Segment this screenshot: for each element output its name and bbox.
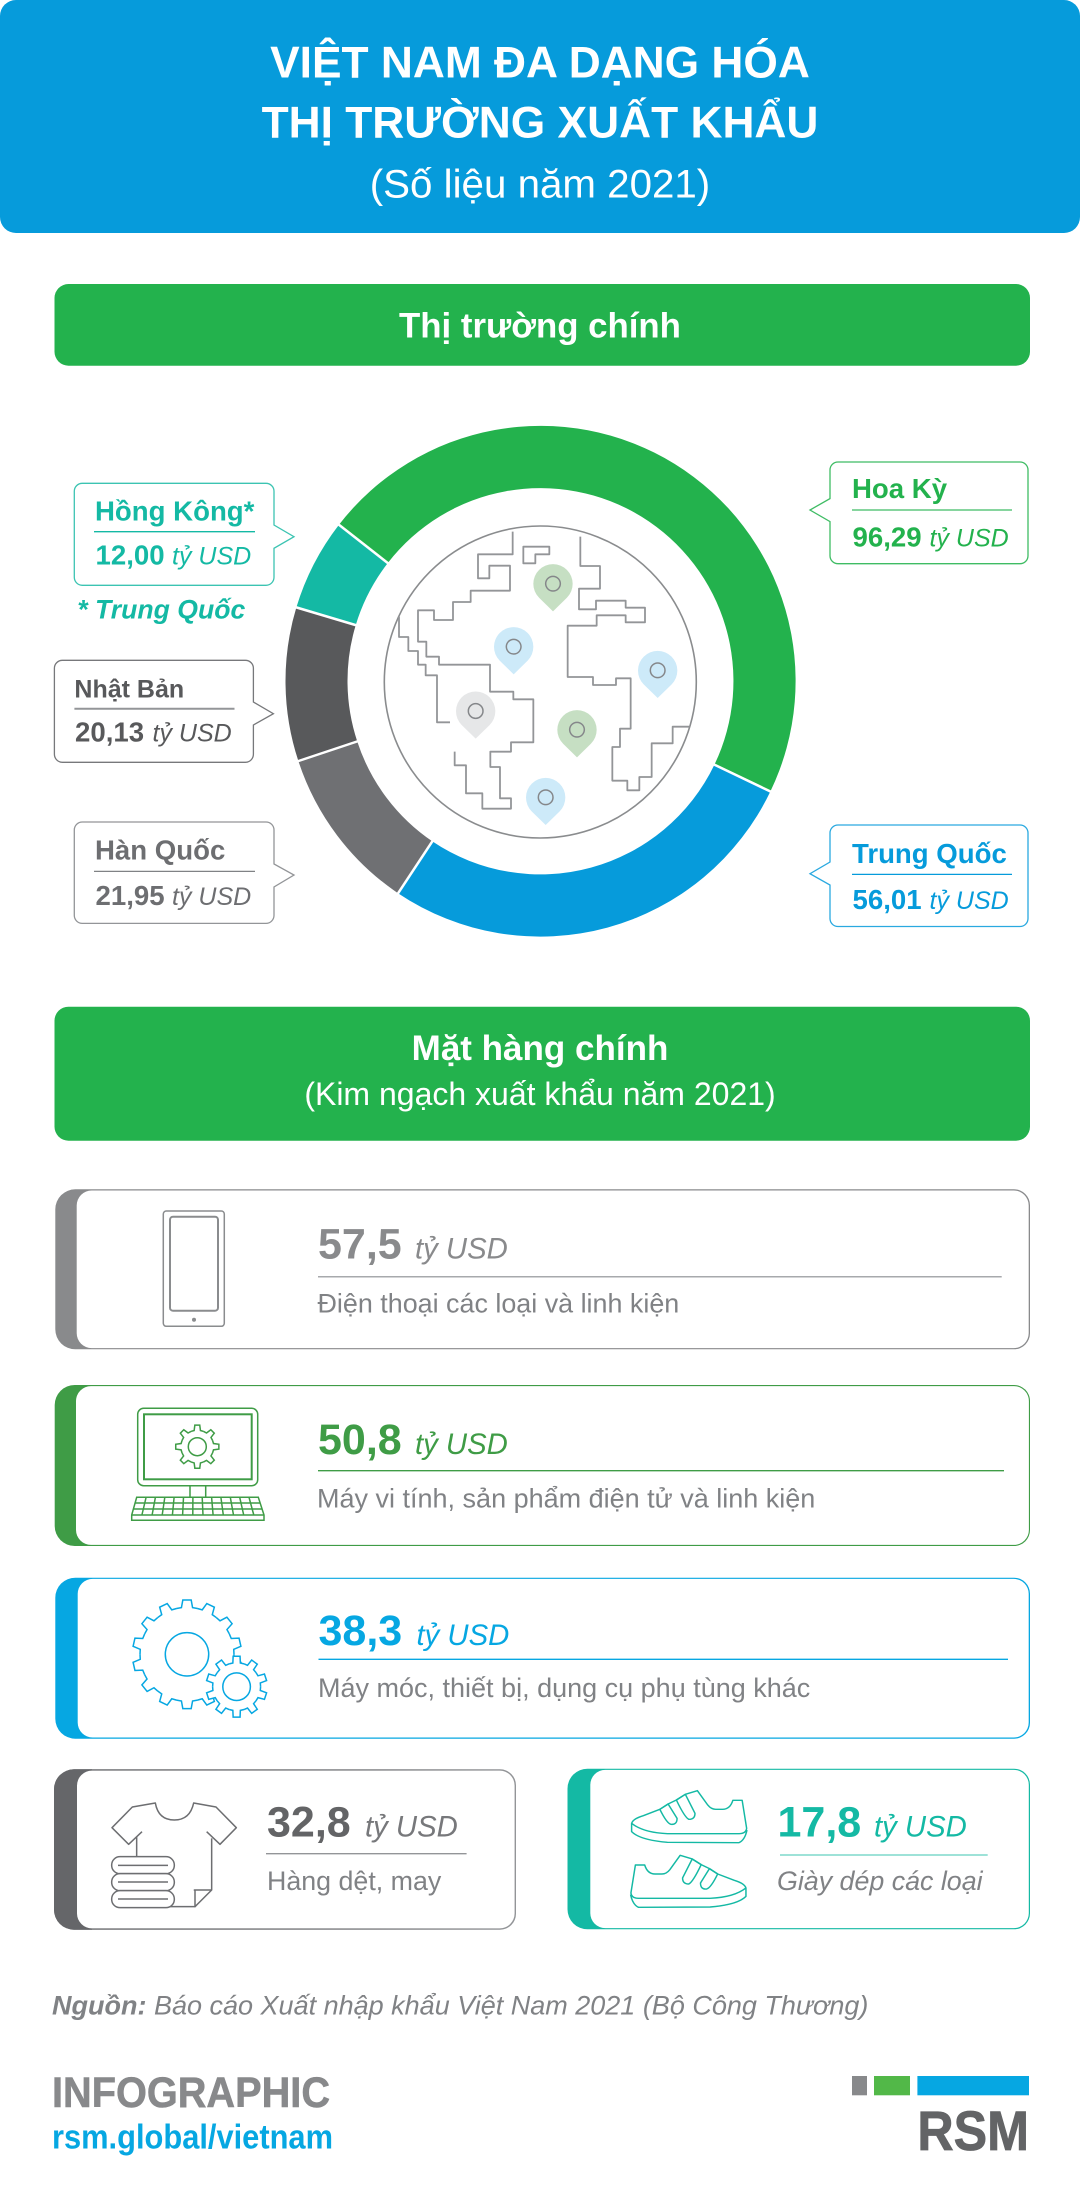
label: footwear: Giày dép các loại [777, 1866, 984, 1896]
value: computers: tỷ USD [415, 1428, 508, 1461]
map pin: green south [557, 710, 597, 757]
callout: Trung Quốc: 56,01 [852, 884, 922, 915]
footnote: Trung Quốc: * Trung Quốc [77, 594, 245, 624]
value: machinery [318, 1607, 509, 1655]
callout: Trung Quốc [810, 825, 1028, 926]
segment: Hoa Kỳ [339, 426, 796, 792]
callout: Nhật Bản: 20,13 [75, 717, 144, 748]
value: footwear: 17,8 [778, 1799, 861, 1847]
callout: Hồng Kông [74, 483, 294, 585]
subtitle: (Số liệu năm 2021) [370, 161, 710, 206]
value: footwear: tỷ USD [874, 1811, 967, 1844]
section heading: main products [54, 1007, 1030, 1141]
value: phones [318, 1221, 508, 1269]
value: textiles: tỷ USD [365, 1811, 458, 1844]
label: phones: Điện thoại các loại và linh kiện [318, 1289, 679, 1319]
icon: shoes [631, 1791, 747, 1907]
map pin: blue centre [494, 627, 533, 674]
callout: Nhật Bản: Nhật Bản [74, 675, 184, 703]
value: textiles [267, 1799, 458, 1847]
section heading: main products: (Kim ngạch xuất khẩu năm 2021) [304, 1076, 776, 1112]
callout: Hàn Quốc: Hàn Quốc [95, 834, 225, 866]
icon: phone [163, 1211, 224, 1326]
callout: Nhật Bản [54, 660, 273, 762]
callout: Hồng Kông: 12,00 [96, 539, 165, 570]
world map globe [384, 526, 696, 838]
footer: website: rsm.global/vietnam [52, 2118, 333, 2156]
map pin: blue east [638, 651, 677, 698]
value: machinery: tỷ USD [416, 1619, 509, 1652]
label: computers: Máy vi tính, sản phẩm điện tử và linh kiện [317, 1484, 815, 1514]
label: machinery: Máy móc, thiết bị, dụng cụ phụ tùng khác [318, 1673, 810, 1703]
section heading: main products: Mặt hàng chính [412, 1029, 668, 1068]
value: phones: 57,5 [318, 1221, 402, 1269]
section heading: main markets [54, 284, 1030, 366]
value: textiles: 32,8 [267, 1799, 351, 1847]
segment: Nhật Bản [286, 607, 357, 761]
panel: machinery [55, 1578, 1030, 1739]
icon: gears [132, 1600, 268, 1717]
value: machinery: 38,3 [318, 1607, 402, 1655]
panel: computers [55, 1385, 1030, 1546]
source note: Nguồn: Báo cáo Xuất nhập khẩu Việt Nam 2021 (Bộ Công Thương) [52, 1990, 868, 2020]
segment: Hồng Kông [296, 525, 388, 625]
map pin: blue south [526, 778, 565, 825]
callout: Hàn Quốc: 21,95 [96, 880, 165, 911]
label: textiles: Hàng dệt, may [267, 1866, 442, 1896]
callout: Hoa Kỳ [810, 462, 1028, 564]
title [262, 38, 818, 147]
segment: Hàn Quốc [298, 742, 432, 893]
segment: Trung Quốc [398, 765, 770, 937]
logo: RSM [852, 2076, 1029, 2162]
section heading: main markets: Thị trường chính [399, 306, 681, 345]
map pin: green north [533, 564, 573, 611]
panel: phones [55, 1189, 1030, 1349]
map outlines [399, 532, 689, 809]
callout: Hoa Kỳ: Hoa Kỳ [852, 473, 948, 504]
callout: Hoa Kỳ: 96,29 [852, 522, 922, 552]
title: VIỆT NAM ĐA DẠNG HÓA [270, 38, 810, 88]
callout: Trung Quốc: tỷ USD [930, 887, 1009, 915]
value: computers [318, 1416, 508, 1464]
callout: Hồng Kông: tỷ USD [172, 542, 251, 570]
footer: infographic label: INFOGRAPHIC [52, 2069, 330, 2117]
icon: computer with gear [132, 1408, 264, 1520]
logo: RSM: RSM [917, 2099, 1029, 2162]
panel: textiles [54, 1769, 516, 1930]
value: footwear [778, 1799, 967, 1847]
callout: Nhật Bản: tỷ USD [152, 720, 232, 748]
donut chart: export markets [286, 426, 796, 937]
callout: Hồng Kông: Hồng Kông* [95, 496, 255, 527]
value: computers: 50,8 [318, 1416, 402, 1464]
header banner [0, 0, 1080, 233]
map pin: gray west [456, 692, 495, 739]
callout: Hoa Kỳ: tỷ USD [930, 524, 1009, 552]
icon: t-shirt and folded clothes [112, 1803, 236, 1908]
panel: footwear [568, 1769, 1030, 1929]
value: phones: tỷ USD [415, 1233, 508, 1266]
callout: Hàn Quốc: tỷ USD [172, 883, 251, 911]
callout: Trung Quốc: Trung Quốc [852, 838, 1007, 869]
title: THỊ TRƯỜNG XUẤT KHẨU [262, 96, 818, 147]
callout: Hàn Quốc [74, 822, 294, 923]
